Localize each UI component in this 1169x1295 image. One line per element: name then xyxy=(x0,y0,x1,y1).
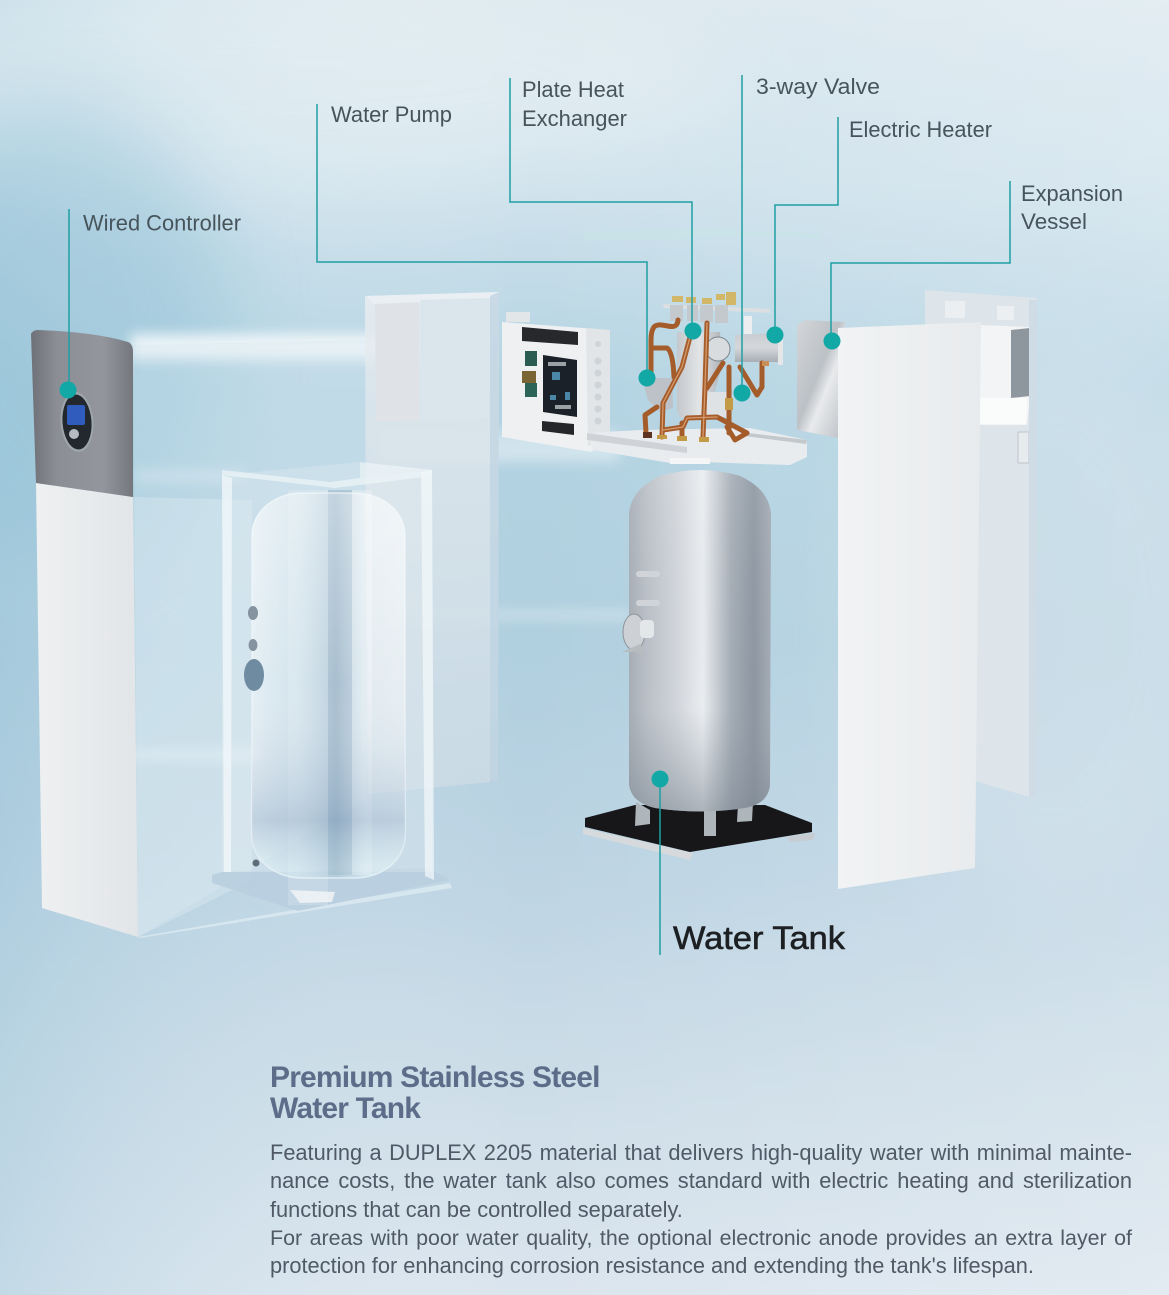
labels: Water Tank xyxy=(673,920,846,956)
labels: Water Pump xyxy=(331,102,452,127)
labels: Exchanger xyxy=(522,106,627,131)
wired controller display xyxy=(58,391,96,453)
connector lines and dots xyxy=(60,75,1010,955)
knockouts xyxy=(594,341,602,424)
manifold xyxy=(663,304,770,313)
tank ports xyxy=(244,606,264,866)
white lower panel xyxy=(36,483,138,937)
heading: Water Tank xyxy=(270,1092,420,1125)
panel: top plate xyxy=(583,229,820,241)
panel: translucent internal tank xyxy=(212,462,450,911)
tank connectors xyxy=(622,571,660,658)
copper pipes xyxy=(645,320,762,440)
labels: Expansion xyxy=(1021,181,1123,206)
labels: Wired Controller xyxy=(83,210,241,236)
water tank xyxy=(583,470,815,860)
grey top panel xyxy=(31,330,133,497)
body copy: protection for enhancing corrosion resistance and extending the tank's lifespan. xyxy=(270,1253,1034,1278)
body copy: functions that can be controlled separately. xyxy=(270,1197,683,1222)
tank legs xyxy=(635,802,753,836)
body copy xyxy=(270,1140,1132,1278)
hydraulic module xyxy=(642,292,783,442)
green modules xyxy=(525,351,537,366)
heading xyxy=(270,1061,600,1125)
plate heat exchanger xyxy=(677,332,722,418)
tank body xyxy=(629,470,771,812)
text block: description xyxy=(270,1061,1132,1278)
tank body xyxy=(252,493,405,878)
labels: Electric Heater xyxy=(849,117,992,142)
panel: rear cover left xyxy=(365,292,499,794)
body copy: For areas with poor water quality, the optional electronic anode provides an extra layer of xyxy=(270,1226,1132,1250)
panel: tray xyxy=(587,428,807,465)
circuit board xyxy=(543,355,577,417)
labels: Plate Heat xyxy=(522,77,624,102)
panel: left front cover with translucent side xyxy=(31,330,452,938)
black base xyxy=(583,805,815,860)
3-way valve xyxy=(706,337,730,361)
pump housing xyxy=(642,378,673,412)
base frame xyxy=(212,868,450,911)
labels: 3-way Valve xyxy=(756,74,880,99)
black connector xyxy=(542,421,574,435)
body copy: nance costs, the water tank also comes standard with electric heating and sterilization xyxy=(270,1168,1132,1193)
panel: expansion vessel xyxy=(797,320,845,438)
panel: rear cover right xyxy=(925,290,1037,797)
panel: electrical control box xyxy=(502,312,610,452)
labels xyxy=(83,74,1123,956)
relay block xyxy=(522,327,578,345)
heading: Premium Stainless Steel xyxy=(270,1061,600,1094)
electric heater xyxy=(735,333,778,362)
body copy: Featuring a DUPLEX 2205 material that delivers high-quality water with minimal mainte- xyxy=(270,1140,1132,1165)
labels: Vessel xyxy=(1021,209,1087,234)
frame walls xyxy=(222,462,432,872)
panel: right front cover xyxy=(838,322,981,889)
